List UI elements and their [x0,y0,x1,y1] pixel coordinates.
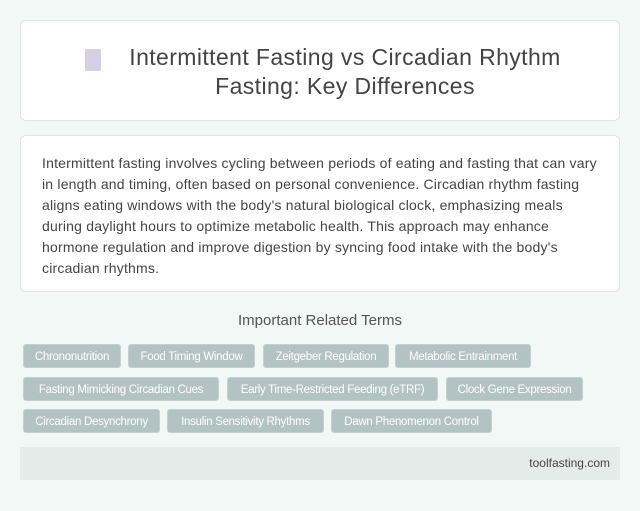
tags: Metabolic Entrainment [409,351,517,363]
tags: Fasting Mimicking Circadian Cues [39,384,203,396]
description text: Intermittent fasting involves cycling between periods of eating and fasting that can vary [42,155,597,171]
title card [20,20,620,121]
title: Fasting: Key Differences [215,73,475,99]
tags: Zeitgeber Regulation [276,351,376,363]
description text: hormone regulation and improve digestion by syncing food intake with the body's [42,239,558,255]
tags: Clock Gene Expression [458,384,571,396]
tags: Early Time-Restricted Feeding (eTRF) [241,384,424,396]
footer text: toolfasting.com [529,456,610,470]
description text: in length and timing, often based on personal convenience. Circadian rhythm fasting [42,176,579,192]
tags: Food Timing Window [140,351,242,363]
tags: Insulin Sensitivity Rhythms [181,416,310,428]
description text [42,155,597,276]
icon: document [85,49,101,71]
footer [20,447,620,480]
heading: related terms: Important Related Terms [238,312,402,329]
title: Intermittent Fasting vs Circadian Rhythm [129,44,561,70]
description text: during daylight hours to optimize metabolic health. This approach may enhance [42,218,549,234]
tags: Circadian Desynchrony [35,416,148,428]
tags: Chrononutrition [35,351,109,363]
description text: aligns eating windows with the body's natural biological clock, emphasizing meals [42,197,563,213]
description card [20,135,620,292]
tags: Dawn Phenomenon Control [344,416,479,428]
title [129,44,561,99]
description text: circadian rhythms. [42,260,159,276]
